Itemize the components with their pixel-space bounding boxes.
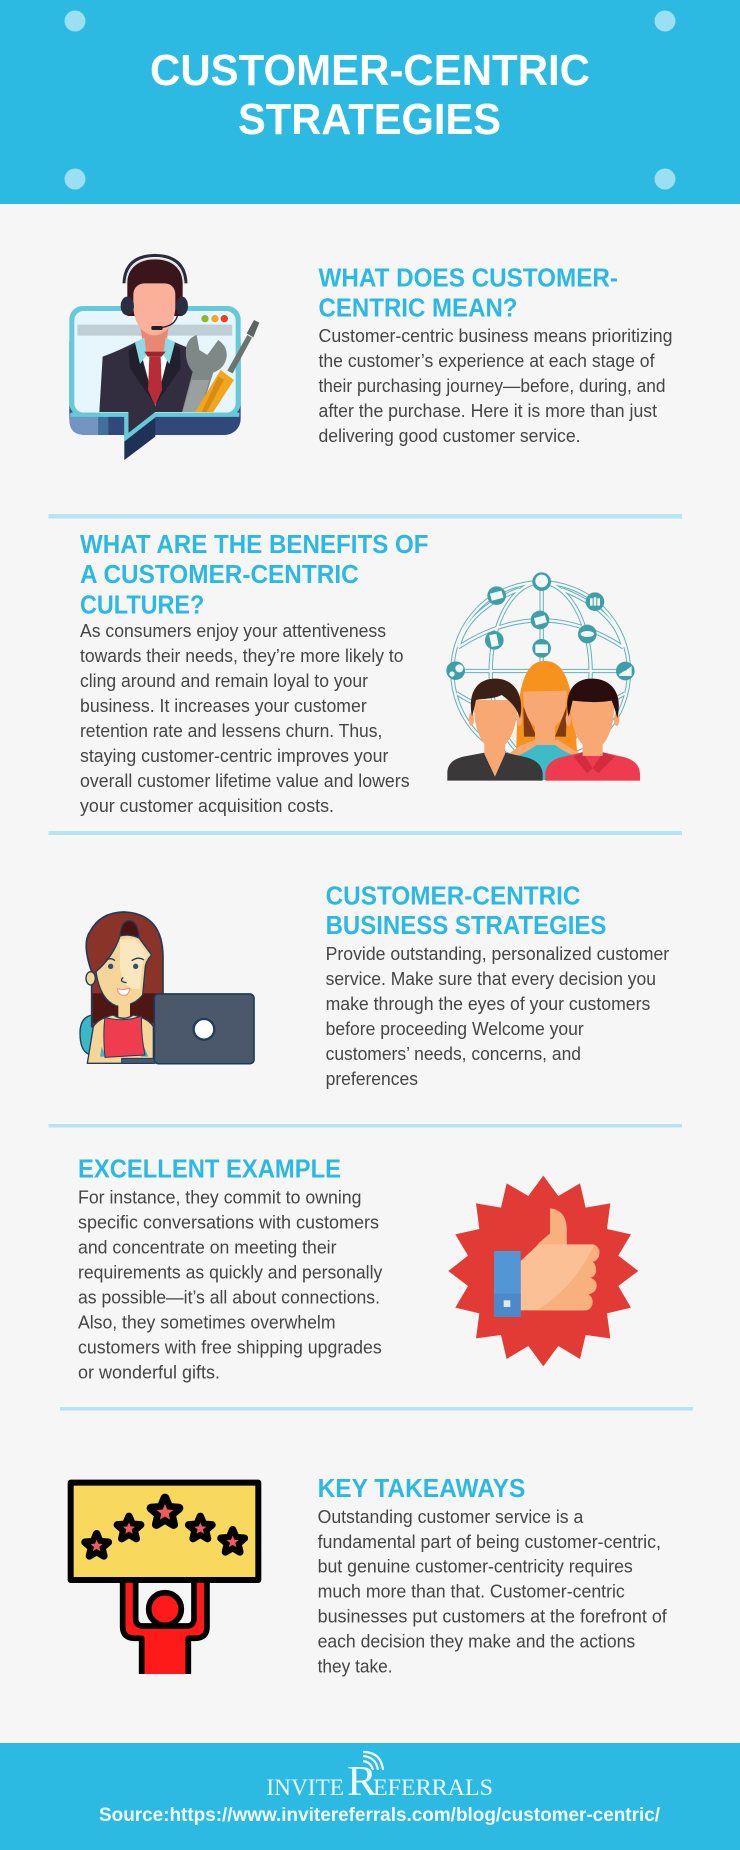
body text: For instance, they commit to owning	[78, 1187, 362, 1207]
body text: business. It increases your customer	[80, 696, 367, 716]
heading: CUSTOMER-CENTRIC	[326, 882, 580, 910]
body text: they take.	[318, 1656, 393, 1676]
body text: make through the eyes of your customers	[326, 994, 650, 1014]
body text: delivering good customer service.	[318, 426, 580, 446]
heading	[318, 265, 618, 323]
panel: excellent example	[78, 1156, 638, 1382]
body text: their purchasing journey—before, during, and	[318, 376, 666, 396]
logo: InviteReferrals: R	[347, 1759, 377, 1805]
body text: and concentrate on meeting their	[78, 1238, 337, 1258]
logo: InviteReferrals: EFERRALS	[373, 1775, 493, 1801]
body text: As consumers enjoy your attentiveness	[80, 621, 386, 641]
body text: Also, they sometimes overwhelm	[78, 1312, 336, 1332]
icon: support agent in speech bubble	[69, 255, 259, 460]
body text	[78, 1187, 382, 1382]
body text: Customer-centric business means prioritizing	[318, 326, 672, 346]
panel: benefits of customer-centric culture	[80, 531, 640, 816]
body text: specific conversations with customers	[78, 1212, 379, 1232]
body text: as possible—it’s all about connections.	[78, 1288, 380, 1308]
heading: KEY TAKEAWAYS	[318, 1475, 525, 1503]
logo: InviteReferrals: INVITE	[266, 1775, 344, 1801]
heading	[80, 531, 428, 620]
body text: cling around and remain loyal to your	[80, 671, 368, 691]
body text: service. Make sure that every decision you	[326, 969, 656, 989]
body text: Provide outstanding, personalized customer	[326, 944, 669, 964]
panel: what does customer-centric mean	[69, 255, 672, 460]
body text	[318, 326, 672, 446]
icon: people in front of connected globe	[446, 572, 640, 781]
title: CUSTOMER-CENTRIC	[150, 46, 590, 95]
title: STRATEGIES	[238, 95, 501, 144]
header banner	[0, 0, 740, 204]
body text: your customer acquisition costs.	[80, 796, 334, 816]
panel: key takeaways	[71, 1475, 668, 1687]
heading: WHAT DOES CUSTOMER-	[318, 265, 618, 293]
body text: fundamental part of being customer-centric,	[318, 1532, 661, 1552]
body text: Outstanding customer service is a	[318, 1507, 584, 1527]
body text: customers with free shipping upgrades	[78, 1338, 382, 1358]
heading: CULTURE?	[80, 592, 204, 620]
body text: businesses put customers at the forefront of	[318, 1606, 668, 1626]
heading	[326, 882, 606, 940]
icon: thumbs up on red badge	[448, 1176, 638, 1366]
body text: each decision they make and the actions	[318, 1632, 635, 1652]
heading: A CUSTOMER-CENTRIC	[80, 561, 359, 589]
logo: InviteReferrals	[266, 1752, 493, 1805]
body text: or wonderful gifts.	[78, 1362, 220, 1382]
body text: retention rate and lessens churn. Thus,	[80, 721, 382, 741]
body text	[80, 621, 410, 816]
body text: preferences	[326, 1069, 418, 1089]
body text: towards their needs, they’re more likely to	[80, 646, 404, 666]
body text	[318, 1507, 668, 1676]
body text: overall customer lifetime value and lowers	[80, 771, 410, 791]
body text: the customer’s experience at each stage of	[318, 351, 655, 371]
heading: WHAT ARE THE BENEFITS OF	[80, 531, 428, 559]
body text: staying customer-centric improves your	[80, 746, 388, 766]
body text: before proceeding Welcome your	[326, 1019, 584, 1039]
icon: woman with laptop	[80, 912, 254, 1064]
body text: after the purchase. Here it is more than just	[318, 401, 657, 421]
footer band	[0, 1743, 740, 1850]
icon: person holding five star sign	[71, 1483, 258, 1687]
title	[150, 46, 590, 144]
body text: much more than that. Customer-centric	[318, 1582, 625, 1602]
heading: BUSINESS STRATEGIES	[326, 912, 606, 940]
body text	[326, 944, 669, 1089]
panel: customer-centric business strategies	[80, 882, 669, 1089]
body text: but genuine customer-centricity requires	[318, 1556, 633, 1576]
heading: EXCELLENT EXAMPLE	[78, 1156, 341, 1184]
body text: customers’ needs, concerns, and	[326, 1044, 581, 1064]
heading: CENTRIC MEAN?	[318, 295, 518, 323]
source link text: Source:https://www.invitereferrals.com/blog/customer-centric/	[99, 1805, 661, 1826]
body text: requirements as quickly and personally	[78, 1262, 382, 1282]
